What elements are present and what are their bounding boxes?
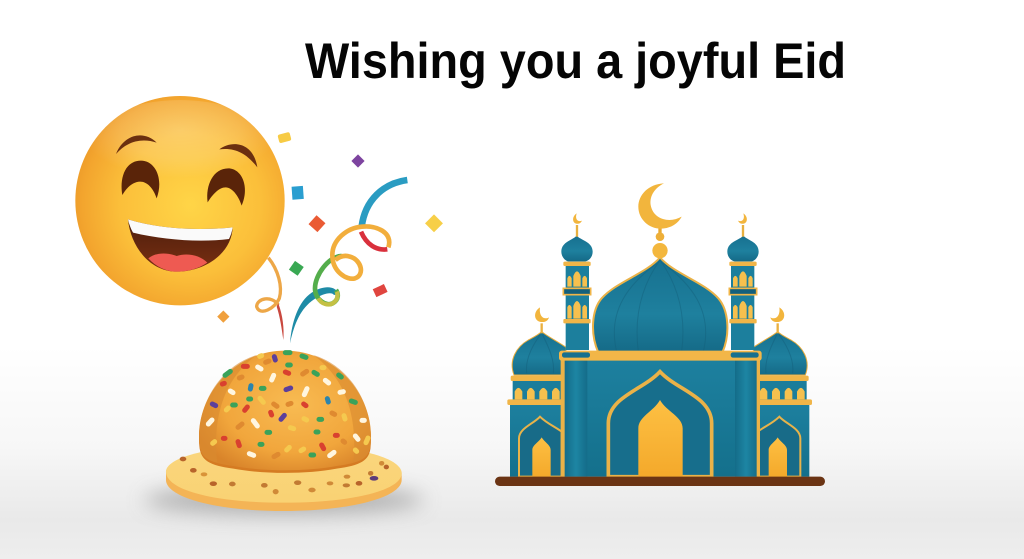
streamer: blue bbox=[362, 180, 407, 227]
icon: sweet on a plate bbox=[144, 351, 424, 514]
confetti: orange bbox=[217, 311, 229, 323]
finial and crescent bbox=[638, 183, 682, 258]
confetti: blue bbox=[292, 186, 304, 200]
plate shadow bbox=[144, 486, 424, 514]
right minaret bbox=[727, 213, 759, 350]
right eyebrow bbox=[219, 144, 257, 167]
main hall bbox=[559, 351, 762, 477]
left eye bbox=[122, 161, 159, 198]
plate bbox=[166, 445, 402, 511]
confetti: red-orange bbox=[309, 215, 325, 232]
left minaret bbox=[561, 213, 593, 350]
dome bbox=[199, 353, 371, 473]
left side wing bbox=[507, 307, 566, 477]
confetti: yellow diamond bbox=[425, 214, 443, 232]
confetti: yellow bbox=[277, 132, 292, 143]
streamer: green bbox=[315, 256, 342, 304]
cornice bbox=[559, 351, 762, 361]
streamer: teal bbox=[290, 287, 338, 343]
streamer: red bbox=[361, 232, 387, 250]
title: Wishing you a joyful Eid bbox=[305, 33, 846, 89]
confetti: red bbox=[373, 284, 388, 297]
sprinkles bbox=[208, 353, 368, 457]
confetti: green bbox=[289, 261, 304, 276]
dome side lobes bbox=[199, 355, 257, 463]
left eyebrow bbox=[116, 135, 157, 154]
streamer: orange curl bbox=[257, 258, 280, 311]
main dome bbox=[593, 257, 727, 353]
plate crumbs bbox=[180, 457, 389, 494]
confetti and streamers bbox=[217, 132, 443, 343]
tongue bbox=[148, 253, 207, 272]
right eye bbox=[207, 168, 245, 206]
central arch bbox=[608, 372, 712, 477]
mouth bbox=[128, 219, 233, 272]
streamer: gold loop bbox=[332, 226, 389, 279]
central door bbox=[638, 400, 683, 477]
icon: laughing emoji face bbox=[75, 96, 285, 305]
ground base bbox=[495, 477, 825, 486]
teeth bbox=[128, 219, 233, 241]
icon: mosque bbox=[495, 183, 825, 486]
right side wing bbox=[753, 307, 812, 477]
confetti: purple bbox=[351, 154, 365, 168]
